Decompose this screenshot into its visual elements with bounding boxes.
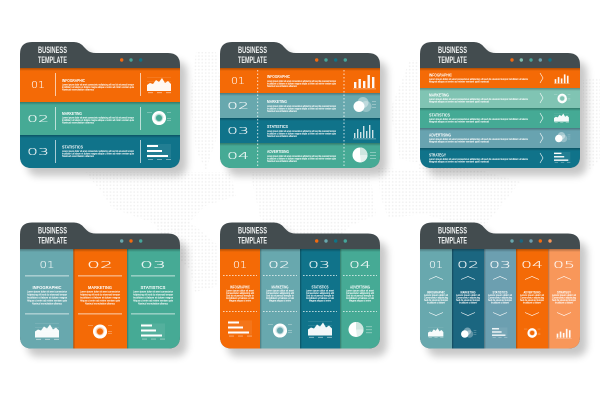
row 3: statistics: STATISTICS [267, 124, 288, 129]
folder body [220, 42, 380, 168]
column 3: statistics: Incididunt ut labore et dolore magna [133, 296, 174, 300]
row 4: advertising: ADVERTISING [429, 133, 451, 138]
column 1: infographic: Incididunt ut labore et do [226, 297, 255, 300]
heading: business template [38, 226, 67, 246]
stacked rows [220, 68, 380, 168]
heading: business template [38, 45, 67, 66]
row 4: advertising [227, 148, 376, 163]
column 3: statistics [131, 260, 175, 339]
row 1: infographic: Nostrud exercitation ullamco [62, 88, 95, 92]
row 2: marketing: MARKETING [62, 111, 82, 116]
folder body [220, 222, 380, 348]
column 4: advertising: ADVERTISING [524, 290, 541, 294]
column 1: infographic: 01 [429, 260, 443, 271]
column 5: strategy: Lorem ipsum dolor sit [552, 294, 576, 297]
panel: folder card 5 with four columns [220, 222, 387, 356]
row 5: strategy: Magna aliqua ut enim ad minim veniam quis nostrud [429, 160, 490, 163]
row 4: advertising: 04 [227, 151, 249, 162]
column 1: infographic [25, 260, 69, 340]
column 3: statistics [488, 260, 513, 338]
column 2: marketing: MARKETING [460, 290, 476, 294]
column 2: marketing: Incididunt ut labore et do [266, 297, 295, 300]
column 3: statistics: 03 [489, 260, 511, 271]
column 4: advertising: Consectetur adipiscing [520, 296, 545, 300]
panel: folder card 1 with three rows [20, 42, 187, 176]
column 3: statistics: Aliqua ut enim ad minim veniam quis [133, 300, 174, 302]
heading: business template [438, 45, 467, 66]
heading: business template: TEMPLATE [438, 55, 467, 66]
row 3: statistics: Lorem ipsum dolor sit amet consectetur adipiscing elit sed do eiusmod tempor [267, 130, 336, 133]
row 3: statistics: Incididunt ut labore et dolore magna aliqua ut enim ad minim veniam quis [62, 152, 135, 156]
indicator dots [510, 58, 552, 62]
row 2: marketing [227, 97, 376, 113]
card shadow [227, 50, 387, 176]
folder body [420, 42, 580, 168]
dotted world map background [85, 52, 600, 292]
column 5: strategy: Sed do eiusmod tempor [552, 299, 576, 302]
row 2: marketing [429, 93, 570, 103]
panel: folder card 6 with five columns [420, 222, 587, 356]
column 3: statistics: Lorem ipsum dolor sit amet [306, 290, 334, 292]
column 3: statistics: STATISTICS [492, 290, 508, 294]
row 2: marketing: Nostrud exercitation ullamco [267, 110, 298, 113]
row 2: marketing: MARKETING [267, 99, 287, 104]
row 2: marketing: Lorem ipsum dolor sit amet consectetur adipiscing elit sed do eiusmod tempor [62, 116, 134, 120]
column 1: infographic: Lorem ipsum dolor sit amet [226, 290, 254, 292]
column 2: marketing: Lorem ipsum dolor sit amet consectetur [80, 290, 120, 294]
row 5: strategy: Lorem ipsum dolor sit amet consectetur adipiscing elit sed do eiusmod tempor incididunt ut labore [429, 158, 529, 161]
folder body [20, 42, 180, 168]
column 3: statistics: Magna aliqua ut enim [309, 300, 331, 302]
panel: folder card 3 with five rows [420, 42, 587, 176]
row 1: infographic: INFOGRAPHIC [62, 78, 86, 83]
indicator dots [120, 239, 142, 243]
row 1: infographic: Nostrud exercitation ullamco [267, 85, 298, 88]
card shadow [27, 230, 187, 356]
column 2: marketing: Incididunt ut labore et dolore magna [80, 296, 121, 300]
row 4: advertising: Lorem ipsum dolor sit amet consectetur adipiscing elit sed do eiusmod tempor incididunt ut labore [429, 138, 529, 141]
row 3: statistics: Magna aliqua ut enim ad minim veniam quis nostrud [429, 120, 490, 123]
column 4: advertising [346, 260, 375, 337]
row 2: marketing: Incididunt ut labore et dolore magna aliqua ut enim ad minim veniam quis [267, 108, 337, 110]
heading: business template: BUSINESS [38, 45, 67, 56]
column 3: statistics: Incididunt ut labore et do [306, 297, 335, 300]
column 4: advertising: Incididunt ut labore [523, 302, 542, 304]
column 3: statistics: Consectetur adipiscing elit [306, 292, 334, 295]
column 2: marketing: Aliqua ut enim ad minim veniam quis [80, 300, 121, 302]
indicator dots [120, 58, 142, 62]
column 4: advertising: Sed do eiusmod tempor [520, 299, 544, 302]
heading: business template [438, 226, 467, 246]
column 3: statistics: 03 [140, 260, 166, 271]
column 1: infographic: Lorem ipsum dolor sit [424, 294, 448, 297]
indicator dots [315, 239, 347, 243]
heading: business template: TEMPLATE [38, 236, 67, 246]
column 2: marketing: 02 [87, 260, 113, 271]
dotted row dividers [258, 70, 344, 166]
row 3: statistics: 03 [227, 126, 249, 137]
row 4: advertising: Nostrud exercitation ullamco [267, 160, 298, 163]
column 5: strategy: Incididunt ut labore [555, 302, 574, 304]
card shadow [427, 50, 587, 176]
column 2: marketing: MARKETING [88, 285, 113, 290]
heading: business template: TEMPLATE [438, 236, 467, 246]
row 3: statistics [429, 113, 569, 123]
row 2: marketing: Lorem ipsum dolor sit amet consectetur adipiscing elit sed do eiusmod tempor [267, 105, 336, 108]
column 2: marketing: Consectetur adipiscing elit [266, 292, 294, 295]
row 2: marketing: 02 [227, 101, 249, 112]
column 3: statistics: Consectetur adipiscing [488, 296, 513, 300]
heading: business template: BUSINESS [438, 45, 467, 56]
row 3: statistics [27, 140, 171, 163]
row 2: marketing: Nostrud exercitation ullamco [62, 122, 95, 124]
column 3: statistics: Adipiscing elit sed do eiusmod tempor [133, 294, 173, 296]
stacked rows [420, 68, 580, 168]
row 5: strategy [429, 152, 570, 163]
column 2: marketing: Nostrud exercitation ullamco [85, 302, 116, 306]
row 1: infographic [231, 74, 376, 89]
column 1: infographic: Sed do eiusmod tempor in [226, 294, 255, 298]
row 1: infographic: Incididunt ut labore et dolore magna aliqua ut enim ad minim veniam quis [62, 86, 135, 89]
column 2: marketing: Adipiscing elit sed do eiusmod tempor [80, 294, 120, 296]
column 2: marketing: 02 [268, 260, 290, 271]
row 1: infographic: Incididunt ut labore et dolore magna aliqua ut enim ad minim veniam quis [267, 82, 337, 86]
column 1: infographic: 01 [233, 260, 247, 271]
column 4: advertising [520, 260, 545, 337]
column 4: advertising: Consectetur adipiscing elit [346, 292, 374, 295]
row 3: statistics: 03 [27, 147, 49, 158]
row 3: statistics [227, 124, 376, 139]
column 4: advertising: Magna aliqua ut enim [349, 300, 371, 302]
column 1: infographic: Lorem ipsum dolor sit amet consectetur [27, 290, 67, 294]
column 3: statistics: STATISTICS [312, 284, 329, 290]
columns [420, 249, 580, 349]
column 2: marketing: Lorem ipsum dolor sit [456, 294, 480, 297]
column 2: marketing: Sed do eiusmod tempor [456, 299, 480, 302]
card shadow [227, 230, 387, 356]
column 2: marketing: MARKETING [272, 284, 289, 290]
row 4: advertising: Incididunt ut labore et dolore magna aliqua ut enim ad minim veniam quis [267, 158, 337, 160]
row 3: statistics: Nostrud exercitation ullamco [267, 135, 298, 138]
card shadow [27, 50, 187, 176]
column 1: infographic: Consectetur adipiscing elit [226, 292, 254, 295]
column 4: advertising: Sed do eiusmod tempor in [346, 294, 375, 298]
row 3: statistics: Incididunt ut labore et dolore magna aliqua ut enim ad minim veniam quis [267, 132, 337, 136]
row 1: infographic: 01 [231, 76, 245, 87]
indicator dots [510, 239, 552, 243]
column 2: marketing [78, 260, 122, 337]
column 4: advertising: Lorem ipsum dolor sit [520, 294, 544, 297]
row 4: advertising [429, 132, 570, 143]
column 3: statistics: Nostrud exercitation ullamco [138, 302, 169, 306]
column 3: statistics: Lorem ipsum dolor sit amet consectetur [133, 290, 173, 294]
heading: business template [238, 45, 267, 66]
columns [20, 249, 180, 349]
row 4: advertising: ADVERTISING [267, 149, 289, 154]
row 1: infographic [429, 73, 570, 84]
column 2: marketing: Consectetur adipiscing [456, 296, 481, 300]
column 4: advertising: ADVERTISING [350, 284, 370, 290]
heading: business template: BUSINESS [38, 226, 67, 236]
heading: business template: TEMPLATE [38, 55, 67, 66]
column 1: infographic: Incididunt ut labore [427, 302, 446, 304]
row 3: statistics: Lorem ipsum dolor sit amet consectetur adipiscing elit sed do eiusmod tempor [62, 150, 134, 153]
row 1: infographic: Lorem ipsum dolor sit amet consectetur adipiscing elit sed do eiusmod tempor [62, 84, 134, 86]
row 3: statistics: Lorem ipsum dolor sit amet consectetur adipiscing elit sed do eiusmod tempor incididunt ut labore [429, 118, 529, 121]
indicator dots [315, 58, 347, 62]
column 3: statistics: Lorem ipsum dolor sit [488, 294, 512, 297]
row 5: strategy: STRATEGY [429, 153, 446, 158]
column 3: statistics: STATISTICS [140, 285, 166, 290]
columns [220, 249, 380, 349]
column 5: strategy: 05 [553, 260, 575, 271]
heading: business template: BUSINESS [438, 226, 467, 236]
column 1: infographic: Nostrud exercitation ullamco [32, 302, 63, 306]
row 2: marketing: Incididunt ut labore et dolore magna aliqua ut enim ad minim veniam quis [62, 119, 135, 122]
column dashed rules [223, 276, 377, 312]
row 2: marketing: MARKETING [429, 93, 449, 98]
row 1: infographic: INFOGRAPHIC [267, 74, 291, 79]
row 1: infographic: Lorem ipsum dolor sit amet consectetur adipiscing elit sed do eiusmod tempor [267, 80, 336, 83]
folder body [20, 222, 180, 348]
column 4: advertising: 04 [349, 260, 371, 271]
folder body [420, 222, 580, 348]
row 1: infographic: INFOGRAPHIC [429, 73, 453, 78]
heading: business template: BUSINESS [238, 45, 267, 56]
column 1: infographic: Aliqua ut enim ad minim veniam quis [27, 300, 68, 302]
column 1: infographic: INFOGRAPHIC [427, 290, 445, 294]
column 3: statistics [306, 260, 335, 338]
column 2: marketing: Incididunt ut labore [459, 302, 478, 304]
row 3: statistics: STATISTICS [62, 144, 83, 150]
column 4: advertising: Incididunt ut labore et do [346, 297, 375, 300]
row 3: statistics: Nostrud exercitation ullamco [62, 155, 95, 158]
row 2: marketing: Magna aliqua ut enim ad minim veniam quis nostrud [429, 100, 490, 103]
row 1: infographic: Lorem ipsum dolor sit amet consectetur adipiscing elit sed do eiusmod tempor incididunt ut labore [429, 78, 529, 81]
column 5: strategy: Consectetur adipiscing [552, 296, 577, 300]
row 1: infographic [31, 73, 171, 96]
heading: business template: TEMPLATE [238, 236, 267, 246]
panel: folder card 2 with four rows [220, 42, 387, 176]
row 2: marketing [27, 107, 171, 130]
column 2: marketing: Sed do eiusmod tempor in [266, 294, 295, 298]
column 5: strategy: STRATEGY [557, 290, 572, 294]
stacked rows [20, 68, 180, 168]
row 2: marketing: Lorem ipsum dolor sit amet consectetur adipiscing elit sed do eiusmod tempor incididunt ut labore [429, 98, 529, 101]
column 4: advertising: 04 [521, 260, 543, 271]
column 1: infographic [226, 260, 255, 336]
heading: business template: BUSINESS [238, 226, 267, 236]
column 1: infographic: Magna aliqua ut enim [229, 300, 251, 302]
column 1: infographic: Adipiscing elit sed do eiusmod tempor [27, 294, 67, 296]
column 1: infographic [424, 260, 449, 338]
row 2: marketing: 02 [27, 114, 49, 125]
column 1: infographic: Sed do eiusmod tempor [424, 299, 448, 302]
column 3: statistics: 03 [308, 260, 330, 271]
column 1: infographic: INFOGRAPHIC [32, 285, 62, 290]
panel: folder card 4 with three columns [20, 222, 187, 356]
column 2: marketing [266, 260, 295, 336]
card shadow [427, 230, 587, 356]
column 2: marketing: 02 [457, 260, 479, 271]
column 1: infographic: INFOGRAPHIC [230, 284, 251, 290]
column 4: advertising: Lorem ipsum dolor sit amet [346, 290, 374, 292]
column 2: marketing: Lorem ipsum dolor sit amet [266, 290, 294, 292]
row 1: infographic: Magna aliqua ut enim ad minim veniam quis nostrud [429, 80, 490, 83]
column 2: marketing: Magna aliqua ut enim [269, 300, 291, 302]
column 1: infographic: Consectetur adipiscing [424, 296, 449, 300]
column 3: statistics: Incididunt ut labore [491, 302, 510, 304]
column 1: infographic: Incididunt ut labore et dolore magna [27, 296, 68, 300]
column 3: statistics: Sed do eiusmod tempor [488, 299, 512, 302]
row 3: statistics: STATISTICS [429, 113, 450, 118]
column 3: statistics: Sed do eiusmod tempor in [306, 294, 335, 298]
row 4: advertising: Lorem ipsum dolor sit amet consectetur adipiscing elit sed do eiusmod tempor [267, 155, 336, 158]
heading: business template [238, 226, 267, 246]
column 1: infographic: 01 [40, 260, 54, 271]
column 2: marketing [456, 260, 481, 338]
heading: business template: TEMPLATE [238, 55, 267, 66]
row 1: infographic: 01 [31, 80, 45, 91]
row 4: advertising: Magna aliqua ut enim ad minim veniam quis nostrud [429, 140, 490, 143]
column 5: strategy [552, 260, 577, 339]
